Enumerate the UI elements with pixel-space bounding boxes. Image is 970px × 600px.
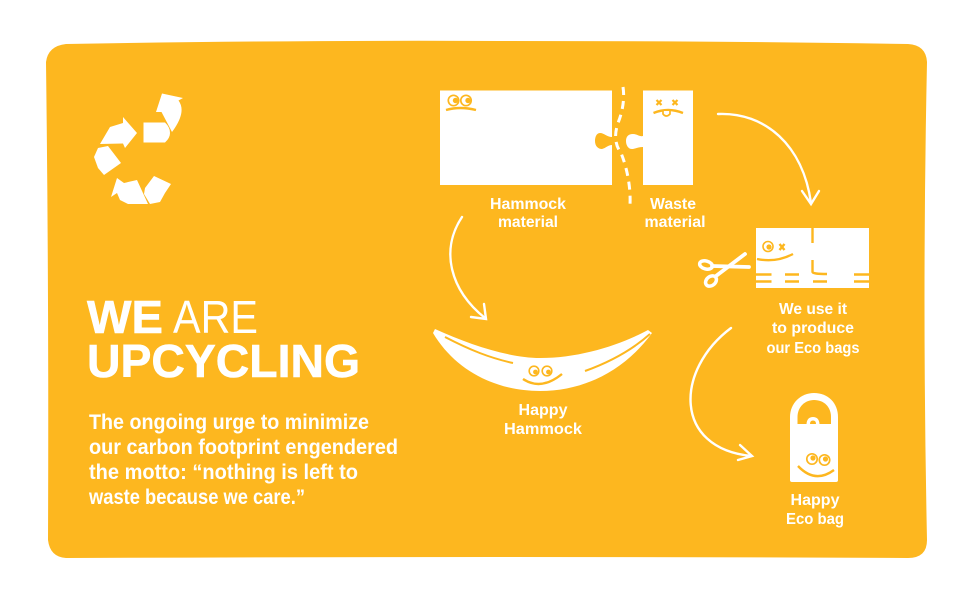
label: happy eco bag: Happy xyxy=(790,492,840,509)
text block: motto: the motto: “nothing is left to xyxy=(89,461,358,484)
text block: motto: waste because we care.” xyxy=(88,486,305,509)
panel: yellow background xyxy=(46,41,927,558)
label: hammock material xyxy=(490,196,566,231)
label: waste material: Waste xyxy=(650,196,696,213)
heading: we are upcycling: WE xyxy=(87,291,163,343)
icon: happy eco bag xyxy=(790,393,838,482)
label: hammock material: material xyxy=(498,214,558,231)
label: waste material: material xyxy=(644,214,706,231)
icon: recycling arrows xyxy=(94,94,183,204)
arrow: eco bags to happy bag xyxy=(691,328,752,460)
label: waste material xyxy=(644,196,706,231)
label: hammock material: Hammock xyxy=(490,196,566,213)
label: we use it to produce our eco bags: our Eco bags xyxy=(766,340,860,357)
icon: waste material piece xyxy=(626,90,693,185)
arrow: material to hammock xyxy=(450,217,486,319)
label: happy eco bag xyxy=(786,492,844,528)
heading: we are upcycling xyxy=(87,291,360,387)
icon: scissors xyxy=(699,254,749,288)
icon: hammock material piece xyxy=(440,90,612,185)
text block: motto xyxy=(88,411,398,509)
arrow: waste to eco bag material xyxy=(718,114,819,204)
icon: happy hammock xyxy=(433,329,652,391)
text block: motto: our carbon footprint engendered xyxy=(89,436,398,459)
heading: we are upcycling: UPCYCLING xyxy=(87,335,360,387)
label: we use it to produce our eco bags: We use it xyxy=(779,301,848,318)
label: we use it to produce our eco bags: to produce xyxy=(772,320,854,337)
label: happy hammock xyxy=(504,402,582,438)
heading: we are upcycling: ARE xyxy=(173,291,258,343)
icon: eco bag material with cut lines xyxy=(756,228,869,288)
cut line: dashed xyxy=(616,87,630,205)
label: happy hammock: Hammock xyxy=(504,421,582,438)
label: happy eco bag: Eco bag xyxy=(786,511,844,528)
text block: motto: The ongoing urge to minimize xyxy=(89,411,369,434)
label: happy hammock: Happy xyxy=(518,402,568,419)
label: we use it to produce our eco bags xyxy=(766,301,860,357)
